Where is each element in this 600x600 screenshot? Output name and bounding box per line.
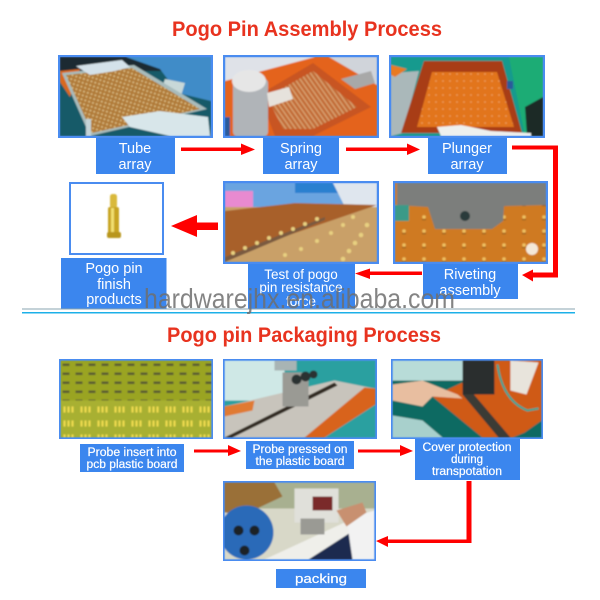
label: packing xyxy=(276,569,366,588)
label: tube array: array xyxy=(118,157,152,173)
photo: test of resistance xyxy=(223,181,379,264)
photo: packing xyxy=(220,481,376,561)
label: probe insert: Probe insert into xyxy=(88,447,176,459)
label: pogo pin finish products: products xyxy=(86,292,142,308)
label: test of pogo pin resistance force xyxy=(248,264,355,309)
arrow: test to finished xyxy=(171,215,218,237)
label: pogo pin finish products xyxy=(61,258,166,309)
panel: spring array step xyxy=(223,55,379,174)
icon: pogo pin xyxy=(107,194,121,238)
arrow: insert to press xyxy=(194,445,241,456)
label: riveting assembly: assembly xyxy=(439,283,501,299)
photo: tube array xyxy=(58,55,213,138)
label: test of pogo pin resistance force: force xyxy=(286,294,316,309)
label: cover protection: Cover protection xyxy=(422,442,512,454)
label: tube array xyxy=(96,138,175,174)
watermark: hardwarejhx.en.alibaba.com xyxy=(144,283,455,314)
panel: cover protection step xyxy=(391,359,543,480)
label: probe insert xyxy=(80,444,184,472)
arrow: spring to plunger xyxy=(346,144,420,155)
panel: plunger array step xyxy=(389,55,545,174)
panel: tube array step xyxy=(58,55,213,174)
label: spring array xyxy=(263,138,339,174)
photo: pogo pin product xyxy=(70,183,163,254)
panel: probe pressed step xyxy=(223,359,377,469)
photo: riveting assembly xyxy=(393,181,548,264)
arrow: press to cover xyxy=(358,445,413,456)
label: pogo pin finish products: finish xyxy=(97,277,131,293)
panel: finished product step xyxy=(61,183,166,309)
label: probe pressed: the plastic board xyxy=(256,456,344,468)
arrow: cover to packing xyxy=(376,481,472,547)
section divider lines xyxy=(22,308,575,314)
label: cover protection: during xyxy=(451,454,483,466)
panel: probe insert step xyxy=(59,359,213,472)
panel: test step xyxy=(223,181,379,309)
photo: probes in pcb xyxy=(59,359,213,439)
photo: cover protection xyxy=(391,359,543,439)
arrow: riveting to test xyxy=(355,268,422,279)
label: plunger array: array xyxy=(450,157,484,173)
panel: riveting assembly step xyxy=(393,181,548,299)
label: cover protection: transpotation xyxy=(432,466,502,478)
arrow: tube to spring xyxy=(181,144,255,155)
label: probe pressed: Probe pressed on xyxy=(252,444,348,456)
label: test of pogo pin resistance force: pin resistance xyxy=(259,280,343,295)
label: riveting assembly: Riveting xyxy=(444,267,496,283)
photo: spring array xyxy=(223,55,379,138)
label: riveting assembly xyxy=(423,264,518,299)
title: packaging process: Pogo pin Packaging Process xyxy=(167,324,441,347)
label: test of pogo pin resistance force: Test of pogo xyxy=(264,267,338,282)
label: pogo pin finish products: Pogo pin xyxy=(85,261,143,277)
label: probe insert: pcb plastic board xyxy=(86,459,178,471)
label: spring array: Spring xyxy=(280,141,322,157)
label: packing: packing xyxy=(295,571,347,586)
panel: packing step xyxy=(220,481,376,588)
label: probe pressed xyxy=(246,441,354,469)
label: cover protection xyxy=(415,439,520,480)
arrow: plunger down to riveting xyxy=(512,146,558,282)
photo: probe press xyxy=(223,359,377,439)
label: spring array: array xyxy=(284,157,318,173)
label: plunger array: Plunger xyxy=(442,141,492,157)
photo: plunger array xyxy=(389,55,545,138)
label: tube array: Tube xyxy=(119,141,151,157)
label: plunger array xyxy=(428,138,507,174)
title: assembly process: Pogo Pin Assembly Process xyxy=(172,18,442,41)
